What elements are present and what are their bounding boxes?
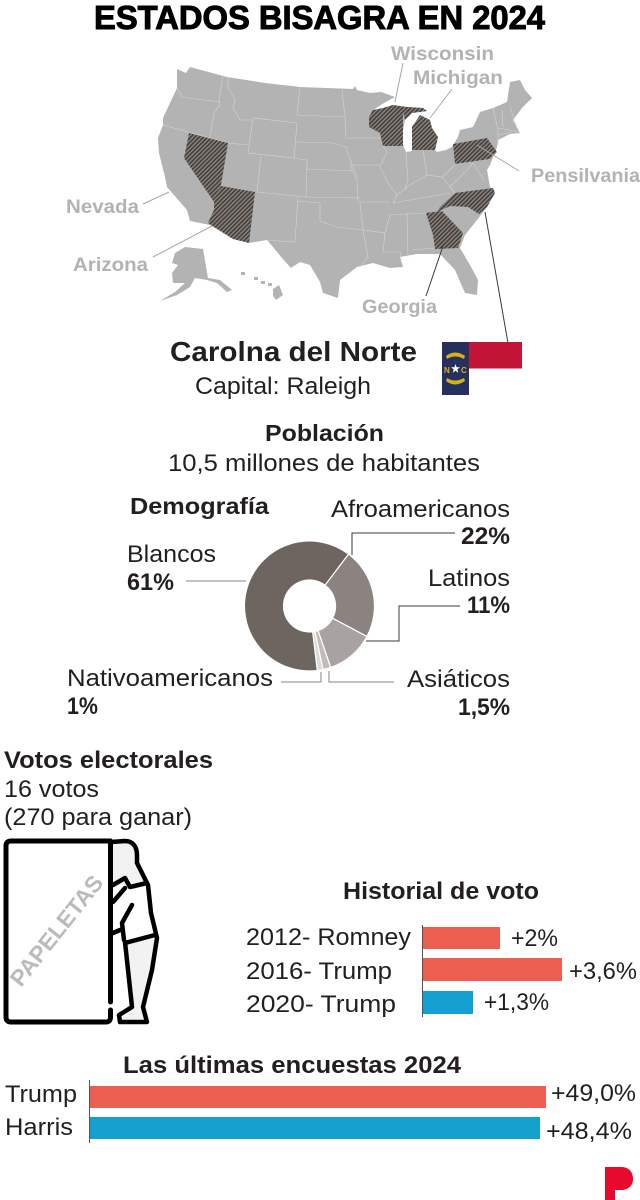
map: dark leader lines: [426, 212, 508, 343]
row: 2020 Trump: 2020- Trump: [246, 991, 396, 1018]
icon: booth panel: [6, 841, 110, 1022]
map: Nevada: [184, 133, 228, 202]
label: Asiáticos: Asiáticos: [407, 666, 510, 693]
donut leader lines: [352, 533, 460, 641]
map: Hawaii: [241, 272, 283, 300]
row: Trump: [5, 1080, 636, 1108]
text: 270 para ganar: (270 para ganar): [4, 804, 192, 831]
heading: Las últimas encuestas 2024: Las últimas encuestas 2024: [123, 1052, 462, 1079]
heading: Carolna del Norte: Carolna del Norte: [170, 336, 417, 367]
icon: voter legs: [119, 935, 157, 1022]
text: PAPELETAS: PAPELETAS: [5, 870, 108, 991]
axis: [89, 1080, 90, 1143]
value: 1,5%: 1,5%: [458, 694, 510, 721]
map: Michigan: [393, 105, 438, 150]
row: 2016 Trump: [246, 958, 637, 985]
row: 2012 Romney: 2012- Romney: [246, 924, 411, 951]
segment: Asiáticos: [315, 631, 331, 670]
label: Blancos: Blancos: [127, 541, 216, 568]
segment: Nativoamericanos: [313, 631, 323, 670]
row: 2012 Romney: +2%: [511, 925, 558, 952]
label: Latinos: Latinos: [428, 565, 510, 592]
row: 2012 Romney: [246, 924, 558, 952]
row: 2020 Trump: +1,3%: [484, 989, 549, 1016]
donut chart: demographics: [244, 541, 374, 671]
label: Nevada: Nevada: [66, 197, 139, 218]
label: Nativoamericanos: Nativoamericanos: [67, 665, 273, 692]
segment: Afroamericanos: [325, 554, 374, 636]
axis: [422, 925, 423, 1017]
bar chart: latest polls: [5, 1080, 636, 1145]
label: Arizona: Arizona: [73, 255, 148, 276]
icon: voter outline: [111, 841, 157, 1022]
map: Pensilvania: [453, 138, 497, 164]
text: population: 10,5 millones de habitantes: [168, 450, 480, 477]
value: 11%: 11%: [467, 592, 510, 619]
row: 2016 Trump: +3,6%: [569, 958, 637, 985]
icon: North Carolina flag: C: [461, 366, 467, 375]
heading: Población: Población: [265, 420, 384, 446]
map: Carolina del Norte: [437, 188, 495, 214]
text: capital: Capital: Raleigh: [195, 373, 371, 400]
map: Georgia: [426, 211, 463, 249]
label: Pensilvania: Pensilvania: [531, 166, 640, 187]
row: Trump: Trump: [5, 1081, 77, 1108]
donut leader lines: light: [186, 581, 394, 682]
map: state borders: [163, 75, 520, 267]
segment: Latinos: [318, 618, 367, 668]
heading: Demografía: Demografía: [130, 493, 269, 519]
map: mainland: [158, 67, 532, 298]
map: Wisconsin: [369, 105, 403, 146]
map: Arizona: [208, 186, 255, 243]
label: Georgia: Georgia: [362, 297, 437, 318]
row: Trump: +49,0%: [551, 1080, 636, 1107]
row: Harris: [5, 1114, 632, 1145]
icon: North Carolina flag: N: [444, 366, 450, 375]
title: ESTADOS BISAGRA EN 2024: [94, 0, 546, 36]
map: United States swing states: [143, 63, 532, 343]
value: 61%: 61%: [127, 569, 174, 596]
icon: voter head and back: [111, 841, 148, 885]
icon: voter behind ballot booth: [6, 841, 157, 1022]
row: Harris: Harris: [5, 1114, 73, 1141]
value: 22%: 22%: [461, 523, 510, 550]
map: leader lines: [143, 63, 519, 257]
label: Wisconsin: Wisconsin: [391, 44, 494, 65]
icon: North Carolina flag: [442, 342, 522, 395]
row: 2016 Trump: 2016- Trump: [246, 958, 392, 985]
label: Michigan: Michigan: [413, 68, 503, 89]
segment: Blancos: [244, 541, 349, 671]
value: 1%: 1%: [67, 693, 98, 720]
heading: Votos electorales: Votos electorales: [4, 747, 213, 774]
heading: Historial de voto: Historial de voto: [343, 878, 539, 905]
row: 2020 Trump: [246, 989, 549, 1018]
row: Harris: +48,4%: [546, 1118, 632, 1145]
label: Afroamericanos: Afroamericanos: [331, 496, 510, 523]
text: 16 votos: 16 votos: [4, 776, 99, 803]
map: Alaska: [160, 247, 232, 301]
logo: [605, 1167, 633, 1200]
bar chart: vote history: [246, 924, 637, 1018]
